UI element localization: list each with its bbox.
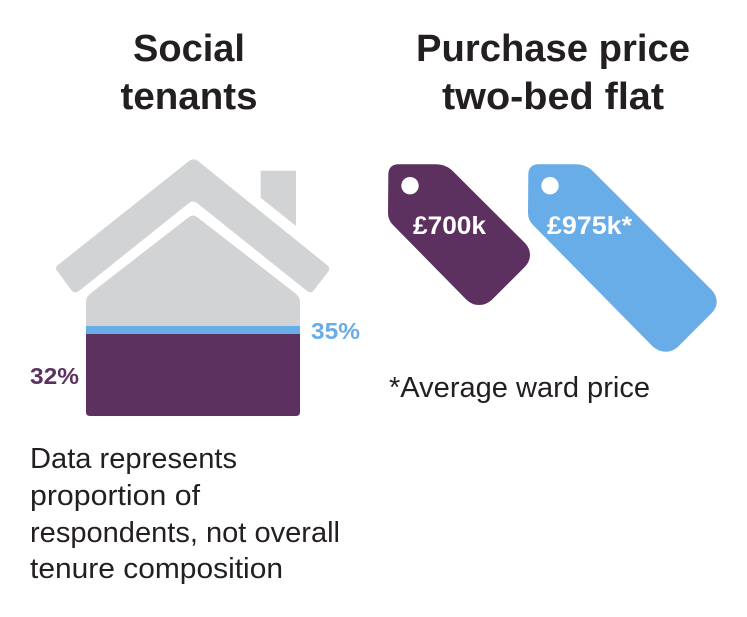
heading: purchase price two-bed flat <box>416 28 690 118</box>
purple band 32% <box>86 334 300 416</box>
heading: social tenants: tenants <box>120 76 258 118</box>
house body <box>86 216 300 326</box>
text block: data note: tenure composition <box>30 553 283 585</box>
house roof <box>56 159 329 292</box>
blue band 35% <box>86 326 300 334</box>
heading: purchase price two-bed flat: two-bed flat <box>442 76 664 118</box>
text block: average ward price: *Average ward price <box>389 372 650 404</box>
text block: data note: Data represents <box>30 443 237 475</box>
label: 35%: 35% <box>311 318 360 344</box>
blue tag shape <box>528 164 717 352</box>
heading: social tenants <box>120 28 258 118</box>
text block: data note: respondents, not overall <box>30 517 340 549</box>
purple tag shape <box>388 164 530 305</box>
price: £700k: £700k <box>413 212 486 240</box>
icon: blue price tag <box>528 164 717 352</box>
tag hole <box>541 177 559 194</box>
text block: data note <box>30 443 340 585</box>
icon: house chart <box>56 159 329 416</box>
icon: purple price tag <box>388 164 530 305</box>
text block: data note: proportion of <box>30 480 201 512</box>
label: 32%: 32% <box>30 363 79 389</box>
heading: social tenants: Social <box>133 28 245 70</box>
heading: purchase price two-bed flat: Purchase price <box>416 28 690 70</box>
house chimney <box>261 171 296 226</box>
price: £975k*: £975k* <box>547 212 632 240</box>
tag hole <box>401 177 419 194</box>
